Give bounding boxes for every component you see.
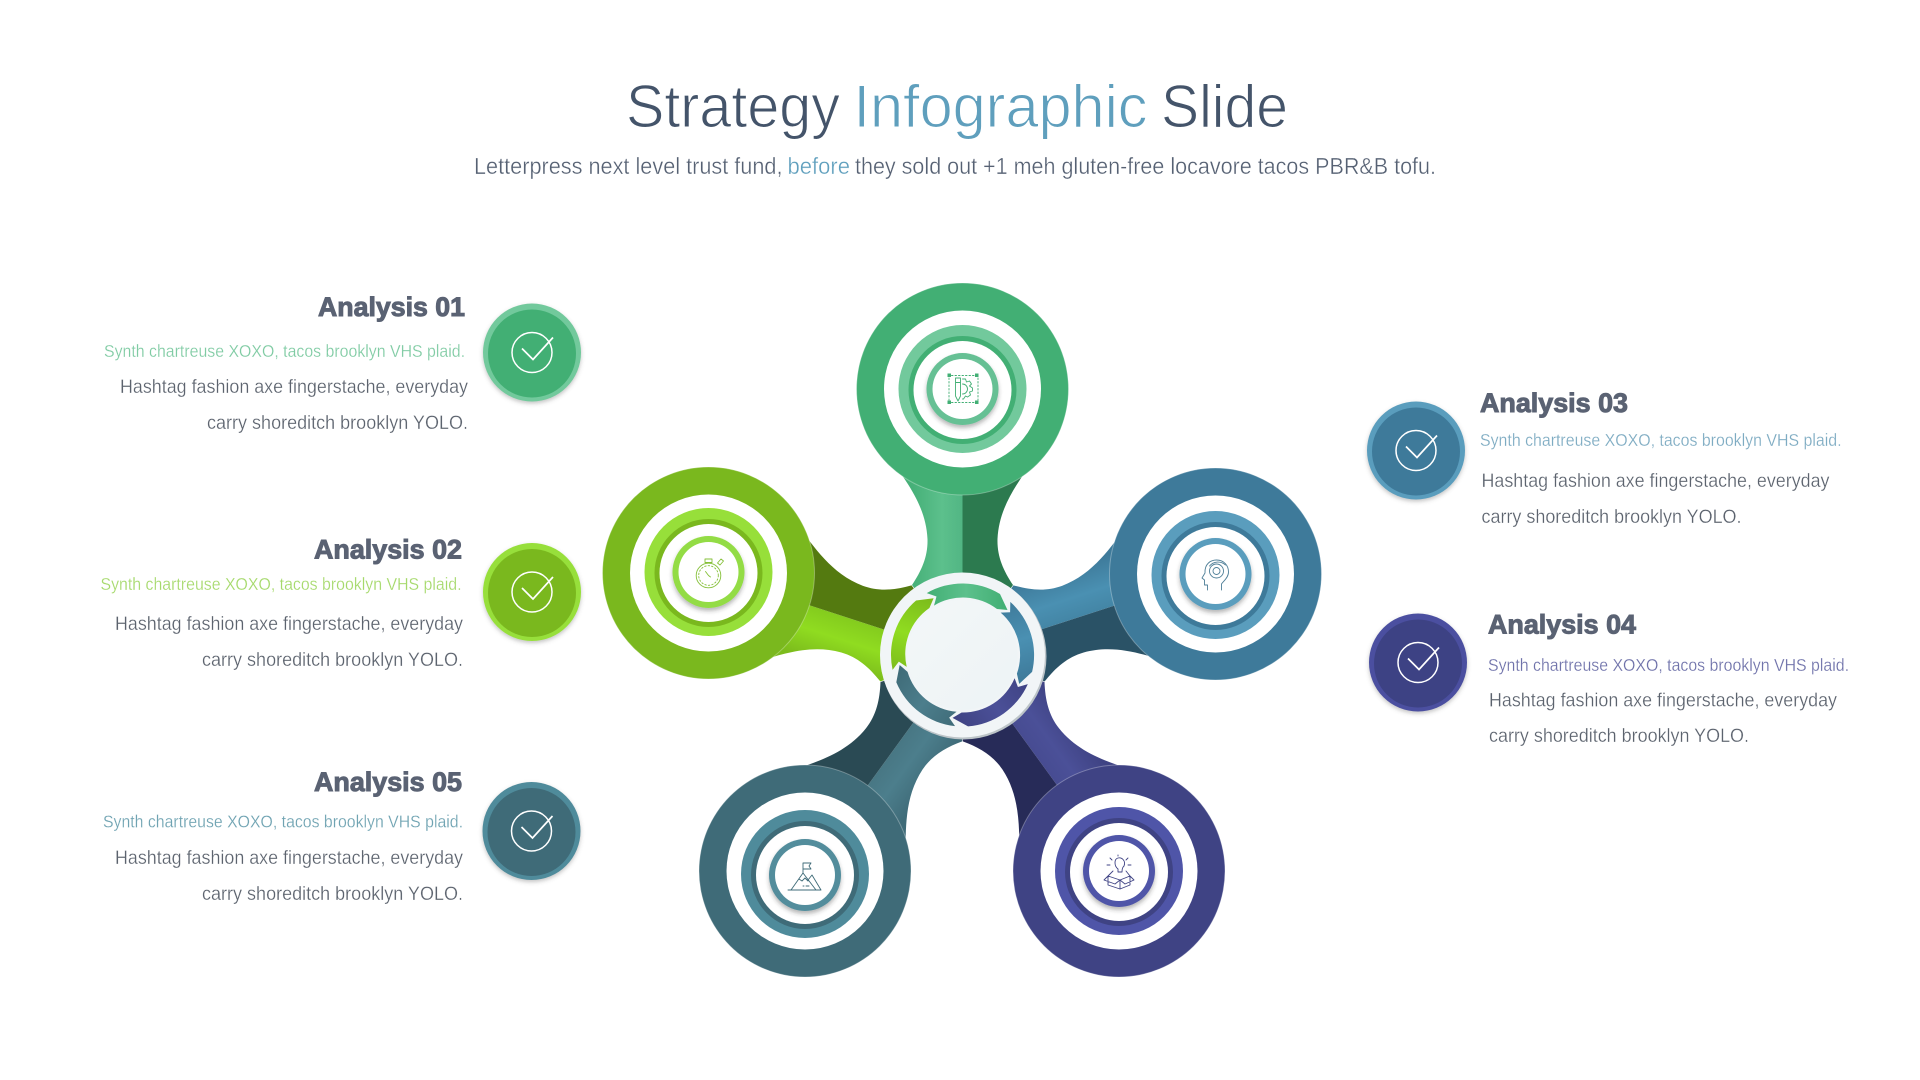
arrow: teal xyxy=(884,665,965,734)
title xyxy=(626,73,1288,140)
arrow: green xyxy=(927,583,1008,610)
title: Slide xyxy=(1161,73,1288,140)
node: right blue xyxy=(1110,468,1322,680)
title: Strategy xyxy=(626,73,840,140)
text block: Analysis 02 xyxy=(100,534,463,671)
text block: Analysis 05: Hashtag fashion axe fingerstache, everyday xyxy=(115,847,463,869)
text block: Analysis 05: Analysis 05 xyxy=(314,767,462,797)
icon: stopwatch xyxy=(696,559,724,588)
text block: Analysis 04 xyxy=(1488,610,1849,747)
badge: Analysis 02 check xyxy=(483,543,581,641)
badge: Analysis 04 check xyxy=(1369,614,1467,712)
text block: Analysis 05 xyxy=(103,767,463,905)
text block: Analysis 02: Synth chartreuse XOXO, tacos brooklyn VHS plaid. xyxy=(100,574,462,594)
text block: Analysis 04: Hashtag fashion axe fingerstache, everyday xyxy=(1489,690,1837,712)
text block: Analysis 03: Analysis 03 xyxy=(1480,388,1628,418)
arm: lower right indigo xyxy=(904,612,1142,863)
text block: Analysis 01: Hashtag fashion axe fingerstache, everyday xyxy=(120,376,468,398)
arm: lower left teal xyxy=(783,612,1021,863)
subtitle: they sold out +1 meh gluten-free locavore tacos PBR&B tofu. xyxy=(855,153,1436,179)
arm: right blue xyxy=(940,523,1180,724)
title: Infographic xyxy=(854,73,1148,140)
node: lower left teal xyxy=(699,765,911,977)
text block: Analysis 02: Hashtag fashion axe fingerstache, everyday xyxy=(115,613,463,635)
badge: Analysis 03 check xyxy=(1367,402,1465,500)
node: top green xyxy=(856,283,1068,495)
text block: Analysis 01: Analysis 01 xyxy=(318,292,465,322)
arrow: lime xyxy=(883,590,934,675)
text block: Analysis 03: Synth chartreuse XOXO, tacos brooklyn VHS plaid. xyxy=(1480,430,1842,450)
node: lower right indigo xyxy=(1013,765,1225,977)
text block: Analysis 03: carry shoreditch brooklyn YOLO. xyxy=(1482,506,1742,528)
text block: Analysis 04: carry shoreditch brooklyn YOLO. xyxy=(1489,725,1749,747)
arm: left lime xyxy=(745,523,985,724)
arrow: blue xyxy=(994,599,1044,684)
text block: Analysis 01 xyxy=(104,292,468,434)
badge: Analysis 05 check xyxy=(482,782,580,880)
subtitle: Letterpress next level trust fund, xyxy=(474,153,782,179)
text block: Analysis 04: Synth chartreuse XOXO, tacos brooklyn VHS plaid. xyxy=(1488,655,1849,675)
icon: head with maze xyxy=(1202,560,1228,590)
text block: Analysis 01: Synth chartreuse XOXO, tacos brooklyn VHS plaid. xyxy=(104,341,465,361)
text block: Analysis 03 xyxy=(1480,388,1842,528)
icon: mountain and flag xyxy=(788,863,821,890)
badge: Analysis 01 check xyxy=(483,304,581,402)
text block: Analysis 05: Synth chartreuse XOXO, tacos brooklyn VHS plaid. xyxy=(103,812,463,832)
arm: top green xyxy=(890,450,1035,655)
icon: box with light bulb xyxy=(1104,855,1134,889)
text block: Analysis 03: Hashtag fashion axe fingerstache, everyday xyxy=(1482,470,1830,492)
text block: Analysis 02: Analysis 02 xyxy=(314,534,462,564)
text block: Analysis 01: carry shoreditch brooklyn YOLO. xyxy=(207,412,468,434)
central hub xyxy=(880,572,1046,740)
subtitle xyxy=(474,153,1436,179)
text block: Analysis 04: Analysis 04 xyxy=(1488,610,1636,640)
subtitle: before xyxy=(788,153,850,179)
node: left lime xyxy=(602,467,814,679)
arrow: indigo xyxy=(953,670,1033,739)
text block: Analysis 05: carry shoreditch brooklyn YOLO. xyxy=(202,883,463,905)
text block: Analysis 02: carry shoreditch brooklyn YOLO. xyxy=(202,649,463,671)
icon: design gear and pencil xyxy=(948,374,978,404)
